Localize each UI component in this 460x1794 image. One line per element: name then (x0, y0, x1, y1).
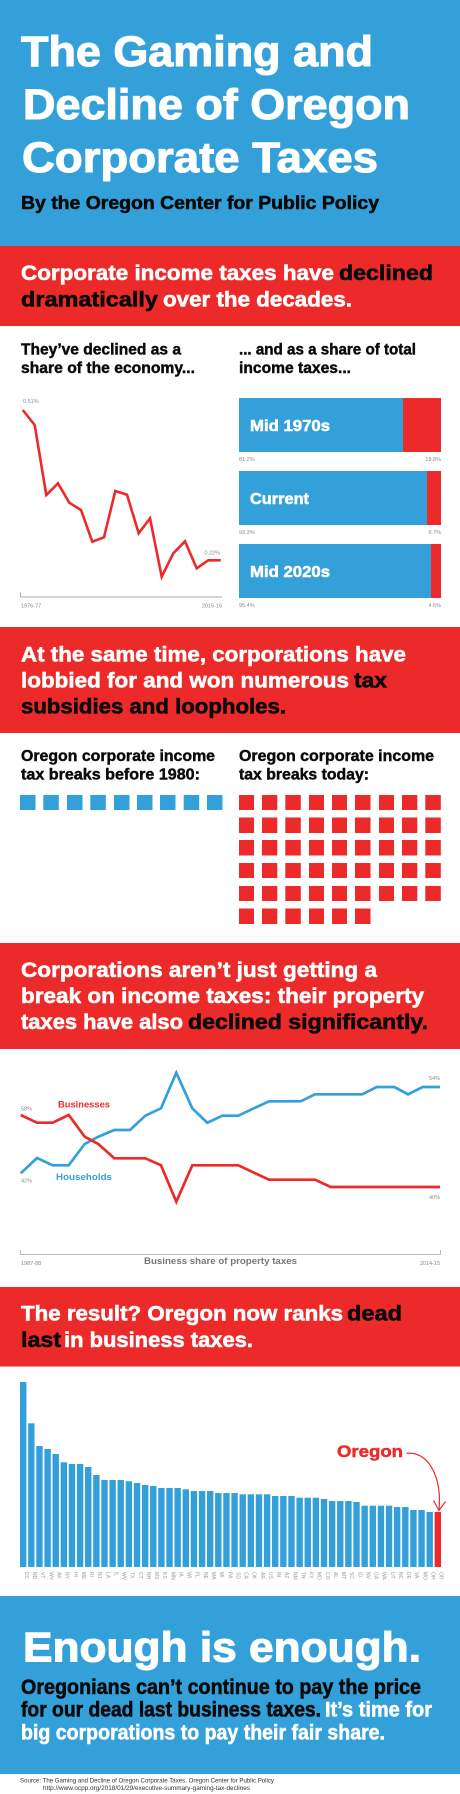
panel: property taxes heading: taxes have also (21, 1011, 183, 1034)
heading: today: Oregon corporate income (239, 748, 434, 765)
title: Corporate Taxes (22, 134, 378, 182)
state labels: MT (340, 1572, 346, 1579)
heading: share of income taxes (239, 342, 416, 377)
label: businesses: Businesses (58, 1100, 110, 1110)
line chart: share of the economy (20, 399, 222, 610)
state labels: NV (364, 1572, 370, 1580)
bar: mid 1970s: 81.2% (239, 457, 255, 463)
state labels: NJ (96, 1572, 102, 1579)
panel: share of the economy (20, 342, 222, 610)
line chart: business share of property taxes: 1987-88 (21, 1261, 41, 1267)
state labels: MA (210, 1572, 216, 1580)
panel: enough is enough (0, 1596, 460, 1774)
heading: before 1980 (21, 748, 215, 784)
bar: mid 2020s: Mid 2020s (250, 564, 330, 581)
source note (20, 1778, 274, 1792)
bar: mid 1970s (239, 398, 441, 463)
state labels: SC (348, 1572, 354, 1579)
panel: income tax decline heading: declined (339, 262, 433, 285)
state labels: TN (299, 1572, 305, 1579)
line chart: business share of property taxes (20, 1073, 440, 1267)
title (21, 28, 410, 182)
line: businesses (21, 1115, 440, 1202)
panel: dead last heading: The result? Oregon now ranks (21, 1302, 343, 1326)
line chart: business share of property taxes: 2014-15 (420, 1261, 440, 1267)
closing text: for our dead last business taxes. (21, 1698, 321, 1722)
bar: mid 1970s: 18.8% (425, 457, 441, 463)
state labels: IN (275, 1572, 281, 1577)
state labels: NY (64, 1572, 70, 1580)
state labels: DE (405, 1572, 411, 1580)
state labels: OH (430, 1572, 436, 1580)
panel: dead last heading: last (21, 1329, 61, 1352)
state labels: WY (47, 1572, 53, 1581)
line chart: business share of property taxes: 42% (21, 1178, 32, 1184)
bar: current (239, 471, 441, 536)
state labels: FL (194, 1572, 200, 1578)
bar: mid 1970s: Mid 1970s (250, 418, 330, 435)
heading: share of economy: share of the economy... (21, 360, 195, 377)
line chart: business share of property taxes: 58% (21, 1106, 32, 1112)
source note: http://www.ocpp.org/2018/01/29/executive-summary-gaming-tax-declines (43, 1786, 250, 1792)
state labels: MD (316, 1572, 322, 1580)
panel: tax breaks today (239, 748, 441, 924)
state labels: NH (145, 1572, 151, 1580)
state labels: WA (381, 1572, 387, 1581)
closing text: It’s time for (325, 1698, 432, 1722)
panel: dead last heading: in business taxes. (64, 1329, 253, 1352)
panel: subsidies and loopholes heading: subsidies and loopholes. (21, 696, 286, 718)
state labels: UT (389, 1572, 395, 1579)
state labels: CT (137, 1572, 143, 1579)
state labels: NM (291, 1572, 297, 1580)
heading: share of income taxes: income taxes... (239, 360, 351, 377)
state labels: IL (112, 1572, 118, 1576)
squares: red tax breaks (239, 795, 441, 924)
heading: before 1980: Oregon corporate income (21, 748, 215, 765)
state labels (23, 1572, 444, 1581)
heading: today: tax breaks today: (239, 766, 369, 784)
line chart: business share of property taxes: 40% (429, 1195, 440, 1201)
panel: income tax decline heading (0, 246, 460, 326)
line chart: share of the economy: 1976-77 (21, 604, 41, 610)
panel: subsidies and loopholes heading (0, 627, 460, 733)
panel: income tax decline heading: dramatically (21, 288, 158, 312)
label: Oregon: Oregon (337, 1442, 403, 1461)
state labels: GA (373, 1572, 379, 1580)
state labels: AK (56, 1572, 62, 1579)
panel: dead last heading: dead (347, 1302, 402, 1326)
state labels: OK (251, 1572, 257, 1580)
heading: share of economy: They’ve declined as a (21, 342, 181, 358)
closing text: Oregonians can’t continue to pay the price (21, 1676, 421, 1699)
state labels: MO (421, 1572, 427, 1580)
state labels: CO (324, 1572, 330, 1580)
label: households: Households (56, 1172, 112, 1183)
state labels: MI (218, 1572, 224, 1578)
state labels: US (267, 1572, 273, 1580)
panel: tax breaks before 1980 (20, 748, 222, 810)
panel: income tax decline heading: Corporate income taxes have (21, 262, 334, 285)
squares: blue tax breaks (20, 795, 222, 810)
state labels: KY (308, 1572, 314, 1579)
state labels: RI (88, 1572, 94, 1577)
bar: current: 93.3% (239, 530, 255, 536)
state labels: ND (31, 1572, 37, 1580)
panel: property taxes heading: Corporations aren’t just getting a (21, 959, 377, 982)
state labels: DC (23, 1572, 29, 1580)
heading: share of income taxes: ... and as a share of total (239, 342, 416, 358)
state labels: WV (121, 1572, 127, 1581)
line: households (21, 1073, 440, 1173)
panel: share of total income taxes (239, 342, 441, 609)
chart caption: Business share of property taxes (144, 1256, 297, 1267)
state labels: MS (153, 1572, 159, 1580)
bar: mid 2020s: 4.6% (428, 603, 441, 609)
title: Decline of Oregon (23, 81, 410, 129)
state labels: SD (234, 1572, 240, 1579)
state labels: AR (259, 1572, 265, 1579)
source note: Source: The Gaming and Decline of Oregon Corporate Taxes. Oregon Center for Public Policy (20, 1778, 274, 1784)
line chart: share of the economy: 0.51% (23, 399, 39, 405)
state labels: HI (72, 1572, 78, 1577)
heading: share of economy (21, 342, 195, 377)
closing text (21, 1676, 432, 1744)
heading: today (239, 748, 434, 784)
line chart: share of the economy: 0.22% (204, 550, 220, 556)
state labels: AZ (283, 1572, 289, 1578)
title: The Gaming and (21, 28, 373, 76)
state labels: WI (186, 1572, 192, 1578)
state labels: TX (129, 1572, 135, 1579)
state labels: AL (332, 1572, 338, 1578)
state labels: OR (438, 1572, 444, 1580)
panel: subsidies and loopholes heading: tax (354, 670, 387, 692)
byline: By the Oregon Center for Public Policy (21, 193, 379, 213)
panel: title header (0, 0, 460, 246)
bar: current: 6.7% (428, 530, 441, 536)
panel: property taxes heading (0, 943, 460, 1049)
state labels: CA (242, 1572, 248, 1580)
state labels: ME (80, 1572, 86, 1580)
state labels: IA (178, 1572, 184, 1577)
bar: Oregon (435, 1512, 441, 1567)
panel: income tax decline heading: over the decades. (163, 288, 352, 312)
bar chart: business taxes by state (20, 1382, 446, 1581)
heading: before 1980: tax breaks before 1980: (21, 766, 200, 784)
closing text: big corporations to pay their fair share. (21, 1722, 385, 1744)
state labels: VT (39, 1572, 45, 1578)
panel: subsidies and loopholes heading: lobbied for and won numerous (21, 670, 349, 692)
panel: dead last heading (0, 1287, 460, 1366)
state labels: KS (161, 1572, 167, 1579)
line chart: share of the economy: 2015-16 (202, 604, 222, 610)
state labels: VA (413, 1572, 419, 1579)
bar: current: Current (250, 491, 310, 508)
panel: subsidies and loopholes heading: At the same time, corporations have (21, 644, 406, 666)
state labels: ID (356, 1572, 362, 1577)
bar: mid 2020s (239, 544, 441, 609)
bar: mid 2020s: 95.4% (239, 603, 255, 609)
state labels: MN (169, 1572, 175, 1580)
state labels: PA (226, 1572, 232, 1579)
panel: property taxes heading: declined significantly. (188, 1011, 428, 1034)
state labels: LA (104, 1572, 110, 1579)
state labels: NC (397, 1572, 403, 1580)
headline: Enough is enough. (23, 1624, 421, 1670)
panel: property taxes heading: break on income taxes: their property (21, 985, 424, 1008)
arrow: Oregon (406, 1453, 446, 1510)
bars: other states (20, 1382, 433, 1567)
state labels: NE (202, 1572, 208, 1580)
line chart: business share of property taxes: 54% (429, 1076, 440, 1082)
